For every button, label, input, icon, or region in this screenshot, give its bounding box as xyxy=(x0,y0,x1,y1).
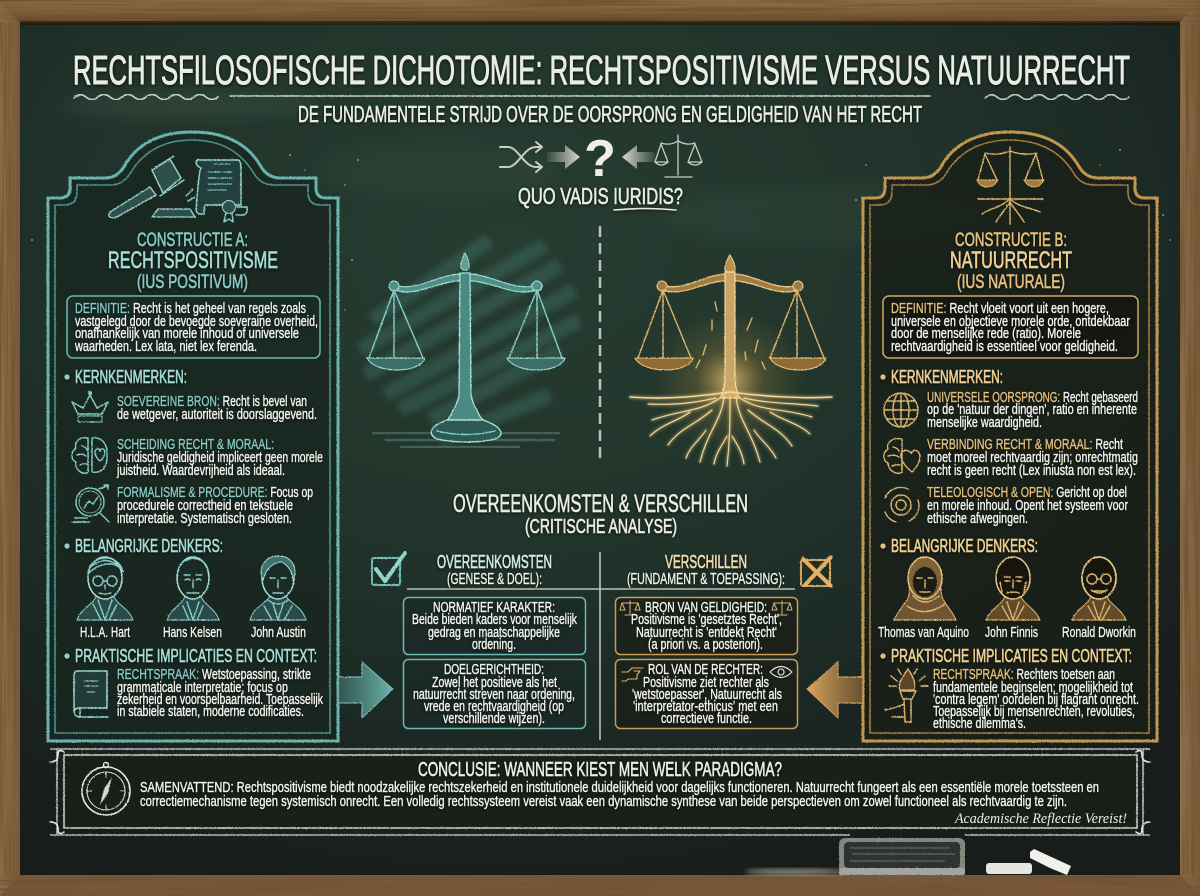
heading: kernkenmerken xyxy=(880,367,1003,387)
column heading: overeenkomsten xyxy=(437,552,552,588)
portrait: H.L.A. Hart xyxy=(77,557,133,620)
panel frame xyxy=(48,132,338,741)
heading: kernkenmerken: KERNKENMERKEN: xyxy=(75,367,187,387)
section heading: OVEREENKOMSTEN & VERSCHILLEN xyxy=(453,490,748,518)
card: bron van geldigheid xyxy=(616,598,798,654)
feature: teleologisch en open: TELEOLOGISCH & OPEN: Gericht op doel xyxy=(927,485,1127,501)
definition box: DEFINITIE: Recht is het geheel van regels zoals xyxy=(75,301,306,317)
feature: soevereine bron: SOEVEREINE BRON: Recht is bevel van xyxy=(117,394,307,410)
panel heading xyxy=(108,230,278,293)
portrait: John Finnis xyxy=(986,557,1040,620)
thinker names xyxy=(878,625,1136,641)
card: bron van geldigheid: Natuurrecht is 'entdekt Recht' xyxy=(636,625,777,641)
card: rol van de rechter: correctieve functie. xyxy=(661,711,752,727)
illustration: teal scales xyxy=(360,240,580,447)
column heading: verschillen xyxy=(627,552,785,588)
feature: formalisme en procedure xyxy=(117,485,313,527)
icon: brain and heart xyxy=(884,439,920,473)
arrow to question mark xyxy=(547,145,580,169)
portrait: Ronald Dworkin xyxy=(1072,557,1126,620)
practical text: grammaticale interpretatie; focus op xyxy=(117,680,288,696)
feature: soevereine bron: de wetgever, autoriteit is doorslaggevend. xyxy=(117,407,317,423)
thinker names xyxy=(80,625,306,641)
question heading: QUO VADIS IURIDIS? xyxy=(518,183,683,209)
thinker names: John Austin xyxy=(251,625,306,641)
feature: teleologisch en open: ethische afwegingen. xyxy=(927,511,1028,527)
feature: universele oorsprong xyxy=(927,390,1138,431)
feature: formalisme en procedure: procedurele correctheid en tekstuele xyxy=(117,498,293,514)
feature: verbinding recht en moraal: recht is geen recht (Lex iniusta non est lex). xyxy=(927,463,1136,479)
practical text: in stabiele staten, moderne codificaties. xyxy=(117,704,304,720)
panel heading: CONSTRUCTIE B: xyxy=(955,230,1067,251)
card: normatief karakter: NORMATIEF KARAKTER: xyxy=(433,600,555,616)
chalk dust xyxy=(745,868,845,876)
dashed divider xyxy=(599,226,601,460)
feature: scheiding recht en moraal xyxy=(116,437,323,479)
thinker names: Ronald Dworkin xyxy=(1062,625,1136,641)
conclusion heading: CONCLUSIE: WANNEER KIEST MEN WELK PARADIGMA? xyxy=(418,759,782,781)
card: bron van geldigheid: Positivisme is 'gesetztes Recht', xyxy=(631,612,782,628)
arrow: left panel to center xyxy=(338,662,393,718)
practical text: RECHTSPRAAK: Rechters toetsen aan xyxy=(933,667,1115,683)
thinker names: H.L.A. Hart xyxy=(80,625,130,641)
practical text: fundamentele beginselen; mogelijkheid tot xyxy=(933,680,1133,696)
icon: magnifier with chart xyxy=(72,485,109,522)
arrow from scales xyxy=(622,145,655,169)
card: rol van de rechter: Positivisme ziet rechter als xyxy=(643,675,769,691)
feature: universele oorsprong: menselijke waardigheid. xyxy=(927,415,1042,431)
practical text xyxy=(117,667,324,720)
practical text: RECHTSPRAAK: Wetstoepassing, strikte xyxy=(117,667,311,683)
heading: belangrijke denkers: BELANGRIJKE DENKERS: xyxy=(891,536,1038,556)
practical text: ethische dilemma's. xyxy=(933,716,1026,732)
card: doelgerichtheid xyxy=(404,660,586,728)
feature: scheiding recht en moraal: SCHEIDING RECHT & MORAAL: xyxy=(117,437,274,453)
card: rol van de rechter: ROL VAN DE RECHTER: xyxy=(648,662,763,678)
card: bron van geldigheid: BRON VAN GELDIGHEID: xyxy=(645,600,767,616)
feature: scheiding recht en moraal: Juridische geldigheid impliceert geen morele xyxy=(117,450,323,466)
card: doelgerichtheid: DOELGERICHTHEID: xyxy=(444,662,544,678)
panel heading: CONSTRUCTIE A: xyxy=(137,230,248,251)
icon: law book xyxy=(74,671,108,717)
arrow: right panel to center xyxy=(807,662,863,718)
definition box: universele en objectieve morele orde, ontdekbaar xyxy=(891,314,1130,330)
definition box: onafhankelijk van morele inhoud of universele xyxy=(75,326,299,342)
panel frame xyxy=(863,132,1157,741)
heading: belangrijke denkers xyxy=(64,536,223,556)
title underline xyxy=(74,94,1129,100)
card: doelgerichtheid: natuurrecht streven naar ordening, xyxy=(413,687,575,703)
section heading xyxy=(453,490,748,538)
feature: universele oorsprong: op de 'natuur der dingen', ratio en inherente xyxy=(927,402,1137,418)
icon: gavel and scroll xyxy=(109,156,247,222)
card: normatief karakter xyxy=(404,598,586,654)
icon: crown xyxy=(72,391,108,422)
definition box: door de menselijke rede (ratio). Morele xyxy=(891,326,1081,342)
heading: praktische implicaties: PRAKTISCHE IMPLICATIES EN CONTEXT: xyxy=(75,646,317,666)
signature note: Academische Reflectie Vereist! xyxy=(954,811,1127,827)
feature: soevereine bron xyxy=(117,394,317,423)
thinker names: Thomas van Aquino xyxy=(878,625,969,641)
heading: praktische implicaties xyxy=(64,646,317,666)
column heading: overeenkomsten: OVEREENKOMSTEN xyxy=(437,552,552,572)
chalk sticks xyxy=(986,849,1071,875)
conclusion frame xyxy=(50,749,1150,835)
conclusion text xyxy=(140,780,1099,810)
panel heading: NATUURRECHT xyxy=(950,247,1072,274)
icon: eye xyxy=(770,666,792,678)
definition box xyxy=(67,296,320,358)
heading: belangrijke denkers: BELANGRIJKE DENKERS: xyxy=(75,536,223,556)
panel heading: RECHTSPOSITIVISME xyxy=(108,247,278,274)
column heading: overeenkomsten: (GENESE & DOEL): xyxy=(447,571,542,588)
card: doelgerichtheid: vrede en rechtvaardigheid (op xyxy=(424,699,564,715)
heading: kernkenmerken xyxy=(64,367,187,387)
portrait: Thomas van Aquino xyxy=(894,557,956,620)
column heading: verschillen: VERSCHILLEN xyxy=(665,552,747,572)
icon: target xyxy=(885,487,919,522)
feature: verbinding recht en moraal: VERBINDING RECHT & MORAAL: Recht xyxy=(927,437,1123,453)
panel heading: (IUS POSITIVUM) xyxy=(137,272,248,293)
icon: crossing arrows xyxy=(500,142,542,172)
card: rol van de rechter: 'interpretator-ethicus' met een xyxy=(633,699,778,715)
panel heading: (IUS NATURALE) xyxy=(957,272,1065,293)
definition box: waarheden. Lex lata, niet lex ferenda. xyxy=(74,339,257,355)
divider lines xyxy=(407,552,795,740)
card: normatief karakter: Beide bieden kaders voor menselijk xyxy=(412,612,578,628)
practical text xyxy=(933,667,1139,732)
icon: check box xyxy=(372,553,405,585)
card: bron van geldigheid: (a priori vs. a posteriori). xyxy=(648,637,763,653)
icon: mini scales xyxy=(620,601,792,615)
column heading: verschillen: (FUNDAMENT & TOEPASSING): xyxy=(627,571,785,588)
card: doelgerichtheid: verschillende wijzen). xyxy=(443,711,545,727)
icon: scales with roots xyxy=(977,147,1044,224)
definition box: rechtvaardigheid is essentieel voor geldigheid. xyxy=(891,339,1118,355)
thinker names: Hans Kelsen xyxy=(163,625,222,641)
chalk scribble xyxy=(360,240,580,440)
heading: kernkenmerken: KERNKENMERKEN: xyxy=(891,367,1003,387)
portrait: John Austin xyxy=(250,556,306,620)
section heading: (CRITISCHE ANALYSE) xyxy=(525,516,677,538)
card: normatief karakter: ordening. xyxy=(472,637,516,653)
panel: constructie B natuurrecht xyxy=(863,132,1157,741)
card: doelgerichtheid: Zowel het positieve als het xyxy=(432,675,557,691)
eraser xyxy=(839,838,965,875)
icon: compass xyxy=(82,762,130,815)
icon: pointing hand xyxy=(622,668,643,681)
feature: verbinding recht en moraal xyxy=(927,437,1138,479)
card: rol van de rechter xyxy=(616,660,798,728)
question mark: ? xyxy=(584,130,616,188)
panel: conclusie xyxy=(50,749,1150,835)
portrait: Hans Kelsen xyxy=(167,557,219,620)
icon: globe xyxy=(884,393,918,427)
definition box xyxy=(883,296,1138,358)
panel: constructie A rechtspositivisme xyxy=(48,132,338,741)
section: overeenkomsten en verschillen xyxy=(372,490,831,740)
practical text: zekerheid en voorspelbaarheid. Toepasselijk xyxy=(117,692,324,708)
feature: teleologisch en open: en morele inhoud. Opent het systeem voor xyxy=(927,498,1128,514)
panel heading xyxy=(950,230,1072,293)
icon: brain and heart xyxy=(72,438,107,473)
question symbol row xyxy=(500,130,702,188)
card: normatief karakter: gedrag en maatschappelijke xyxy=(428,625,560,641)
feature: teleologisch en open xyxy=(927,485,1128,527)
thinker names: John Finnis xyxy=(985,625,1038,641)
card: rol van de rechter: 'wetstoepasser', Natuurrecht als xyxy=(632,687,782,703)
heading: belangrijke denkers xyxy=(880,536,1038,556)
feature: formalisme en procedure: FORMALISME & PROCEDURE: Focus op xyxy=(117,485,313,501)
definition box: DEFINITIE: Recht vloeit voort uit een hogere, xyxy=(891,301,1109,317)
feature: formalisme en procedure: interpretatie. Systematisch gesloten. xyxy=(117,511,292,527)
illustration: golden scales with roots xyxy=(630,255,832,466)
feature: universele oorsprong: UNIVERSELE OORSPRONG: Recht gebaseerd xyxy=(927,390,1138,406)
icon: cross box xyxy=(801,557,831,586)
icon: small scales xyxy=(655,135,702,177)
definition box: vastgelegd door de bevoegde soeveraine overheid, xyxy=(75,314,318,330)
feature: scheiding recht en moraal: juistheid. Waardevrijheid als ideaal. xyxy=(116,463,285,479)
icon: torch xyxy=(885,669,928,722)
